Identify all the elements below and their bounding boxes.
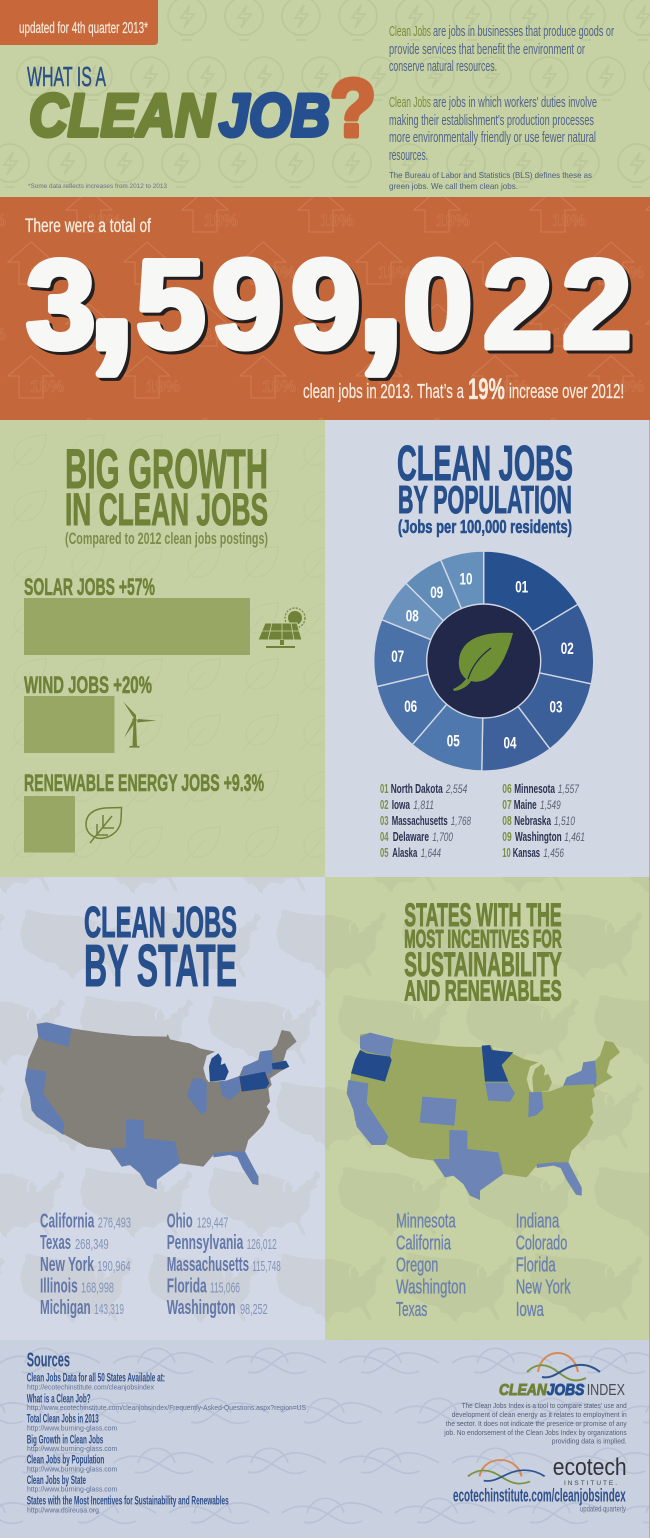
list: states column one: Michigan — [40, 1297, 91, 1319]
list: incentive states column two: New York — [516, 1276, 571, 1298]
source list: Clean Jobs by Population — [27, 1454, 104, 1466]
panel: total clean jobs hero — [0, 194, 650, 420]
icon: leaf — [86, 808, 122, 843]
bar: solar: SOLAR JOBS +57% — [24, 574, 155, 601]
increase statement: 19% — [468, 373, 505, 406]
list: states column two: 98,252 — [240, 1301, 268, 1318]
definition: first paragraph: conserve natural resources. — [389, 58, 497, 75]
disclaimer text: development of clean energy as it relates to employment in — [452, 1410, 627, 1419]
map: incentive states — [347, 1033, 620, 1200]
title: clean job?: JOB — [219, 82, 330, 149]
heading: IN CLEAN JOBS — [65, 484, 268, 535]
big number: 2 — [562, 236, 632, 374]
panel: what is a clean job header — [0, 0, 650, 198]
source list: Total Clean Jobs in 2013 — [27, 1414, 99, 1426]
icon: wind turbine — [123, 702, 157, 748]
legend: top ten states column two: 09 — [502, 829, 512, 844]
legend: top ten states column one: Alaska — [392, 845, 418, 860]
bar: renewable energy — [24, 770, 264, 852]
note: BLS definition — [389, 170, 592, 191]
source list: Clean Jobs Data for all 50 States Available at: — [27, 1373, 165, 1385]
source list: http://www.burning-glass.com — [27, 1466, 117, 1473]
source list: What is a Clean Job? — [27, 1394, 91, 1406]
disclaimer text: job. No endorsement of the Clean Jobs Index by organizations — [443, 1428, 627, 1437]
disclaimer text: the sector. It does not indicate the presence or promise of any — [446, 1419, 627, 1428]
legend: top ten states column two: 06 — [502, 781, 512, 796]
list: incentive states column one: Washington — [396, 1276, 466, 1298]
bar: renewable energy: RENEWABLE ENERGY JOBS +9.3% — [24, 770, 264, 797]
definition: first paragraph: Clean Jobs — [389, 23, 431, 40]
logo: clean jobs index: JOBS — [547, 1382, 585, 1399]
legend: top ten states column two: 1,557 — [558, 782, 580, 796]
heading: sources: Sources — [27, 1350, 70, 1372]
disclaimer text: providing data is implied. — [552, 1436, 627, 1446]
source list — [27, 1373, 306, 1514]
note: BLS definition: green jobs. We call them clean jobs. — [389, 181, 518, 191]
bar: wind: WIND JOBS +20% — [24, 672, 152, 699]
heading — [84, 899, 237, 999]
legend: top ten states column one: 1,644 — [421, 846, 441, 860]
note: BLS definition: The Bureau of Labor and Statistics (BLS) defines these as — [389, 170, 592, 180]
logo: clean jobs index: INDEX — [587, 1382, 625, 1399]
legend: top ten states column one: 1,768 — [451, 814, 471, 828]
legend: top ten states column one: 04 — [380, 829, 389, 844]
list: incentive states column two: Colorado — [516, 1232, 567, 1254]
list: states column one: 190,964 — [97, 1258, 131, 1275]
legend: top ten states column one: North Dakota — [391, 781, 443, 796]
heading: CLEAN JOBS — [84, 899, 237, 947]
list: states column one: 276,493 — [98, 1215, 131, 1232]
segment numbers: 10 — [460, 570, 472, 588]
list: incentive states column two: Iowa — [516, 1299, 545, 1321]
list: states column one — [40, 1211, 131, 1319]
legend: top ten states column two: Washington — [515, 829, 562, 844]
definition: second paragraph: resources. — [389, 147, 428, 164]
panel: footer sources and logos — [0, 1340, 650, 1538]
panel: clean jobs by state — [0, 877, 325, 1340]
legend: top ten states column two: 10 — [502, 845, 511, 860]
list: states column two: 115,748 — [252, 1258, 281, 1275]
list: states column one: 268,349 — [75, 1236, 109, 1253]
segment numbers: 06 — [404, 697, 417, 716]
definition: first paragraph — [389, 23, 614, 75]
legend: top ten states column one: Iowa — [392, 797, 410, 812]
segment numbers: 03 — [550, 698, 562, 716]
legend: top ten states column two: 1,549 — [540, 798, 561, 812]
increase statement — [303, 373, 624, 406]
list: states column two — [167, 1211, 281, 1319]
panel: big growth in clean jobs — [0, 420, 325, 877]
big number: , — [357, 194, 404, 384]
legend: top ten states column one: 01 — [380, 781, 388, 796]
segment numbers: 04 — [504, 734, 517, 752]
subheading: (Jobs per 100,000 residents) — [398, 517, 572, 537]
logo: clean jobs index: CLEAN — [499, 1382, 547, 1399]
logo: ecotech institute: INSTITUTE. — [564, 1480, 617, 1487]
legend: top ten states column two — [502, 781, 585, 860]
list: incentive states column two: Indiana — [516, 1211, 560, 1233]
source list: http://www.dsireusa.org — [27, 1507, 99, 1514]
source list: http://www.burning-glass.com — [27, 1446, 117, 1453]
heading: BY STATE — [84, 932, 237, 999]
list: states column one: 143,319 — [94, 1301, 124, 1318]
panel: states with most incentives — [325, 877, 650, 1340]
legend: top ten states column one — [380, 781, 471, 860]
list: incentive states column one: Texas — [396, 1299, 427, 1321]
tag: updated for 4th quarter — [0, 0, 158, 45]
increase statement: clean jobs in 2013. That’s a — [303, 381, 465, 403]
list: states column two: Florida — [167, 1276, 207, 1298]
legend: top ten states column one: 1,811 — [413, 798, 434, 812]
map: top states by clean jobs — [25, 1022, 297, 1189]
list: states column two: Ohio — [167, 1211, 193, 1233]
note: updated quarterly: updated quarterly — [580, 1505, 626, 1514]
legend: top ten states column one: 03 — [380, 813, 388, 828]
big number: 3 — [26, 236, 96, 374]
segment numbers: 08 — [406, 606, 419, 626]
source list: http://www.burning-glass.com — [27, 1426, 117, 1433]
legend: top ten states column one: 1,700 — [432, 830, 453, 844]
legend: top ten states column two: Kansas — [513, 845, 540, 860]
legend: top ten states column one: Delaware — [393, 829, 429, 844]
list: states column one: California — [40, 1211, 95, 1233]
big number: 0 — [403, 236, 473, 374]
segment numbers — [391, 570, 574, 752]
footnote: *Some data reflects increases from 2012 to 2013 — [28, 183, 167, 190]
heading: what is a: WHAT IS A — [27, 61, 106, 92]
list: incentive states column one — [396, 1211, 466, 1321]
big number: 2 — [483, 236, 553, 374]
list: states column one: 168,998 — [81, 1280, 114, 1297]
list: incentive states column two — [516, 1211, 571, 1321]
legend: top ten states column one: Massachusetts — [392, 813, 448, 828]
tag: updated for 4th quarter: updated for 4th quarter 2013* — [19, 20, 148, 37]
list: incentive states column two: Florida — [516, 1255, 556, 1277]
big number: , — [88, 194, 135, 384]
list: states column one: Illinois — [40, 1276, 78, 1298]
legend: top ten states column two: 08 — [502, 813, 512, 828]
logo: clean jobs index — [499, 1353, 625, 1399]
bar: wind — [24, 672, 152, 753]
title: clean job?: ? — [330, 63, 376, 154]
legend: top ten states column two: 1,456 — [543, 846, 564, 860]
big number: 5 — [136, 236, 206, 374]
definition: second paragraph: Clean Jobs — [389, 94, 431, 111]
panel: clean jobs by population — [325, 420, 650, 877]
big number: 9 — [291, 236, 361, 374]
list: states column two: Washington — [167, 1297, 236, 1319]
intro text: There were a total of — [25, 216, 152, 237]
legend: top ten states column one: 05 — [380, 845, 388, 860]
source list: http://ecotechinstitute.com/cleanjobsindex — [27, 1385, 154, 1392]
segment numbers: 01 — [515, 578, 528, 596]
source list: http://www.burning-glass.com — [27, 1487, 117, 1494]
source list: Clean Jobs by State — [27, 1475, 86, 1487]
list: incentive states column one: Minnesota — [396, 1211, 456, 1233]
big number: 9 — [212, 236, 282, 374]
legend: top ten states column one: 2,554 — [445, 782, 468, 796]
legend: top ten states column two: Maine — [514, 797, 537, 812]
legend: top ten states column one: 02 — [380, 797, 388, 812]
heading — [404, 897, 562, 1008]
legend: top ten states column two: 07 — [502, 797, 512, 812]
logo: ecotech institute: ecotech — [553, 1454, 627, 1481]
list: incentive states column one: Oregon — [396, 1255, 438, 1277]
legend: top ten states column two: 1,461 — [564, 830, 585, 844]
bar: solar — [24, 574, 250, 655]
source list: http://www.ecotechinstitute.com/cleanjobsindex/Frequently-Asked-Questions.aspx?region=US — [27, 1405, 306, 1412]
title: clean job?: CLEAN — [29, 82, 215, 149]
list: states column two: 129,447 — [197, 1215, 228, 1232]
title: clean job? — [29, 63, 376, 154]
heading: BIG GROWTH — [65, 437, 268, 500]
disclaimer text: The Clean Jobs Index is a tool to compare states' use and — [462, 1401, 627, 1410]
segment numbers: 02 — [561, 639, 574, 658]
segment numbers: 07 — [391, 647, 404, 666]
list: incentive states column one: California — [396, 1232, 452, 1254]
chart: radial ranking — [374, 551, 594, 771]
source list: States with the Most Incentives for Sustainability and Renewables — [27, 1495, 229, 1507]
disclaimer text — [443, 1401, 627, 1446]
list: states column one: Texas — [40, 1232, 71, 1254]
icon: solar panel — [258, 608, 305, 648]
list: states column two: 126,012 — [247, 1236, 277, 1253]
legend: top ten states column two: 1,510 — [554, 814, 575, 828]
logo: ecotech institute — [468, 1454, 627, 1487]
heading — [65, 437, 268, 535]
list: states column one: New York — [40, 1254, 95, 1276]
segment numbers: 09 — [430, 583, 443, 602]
segment numbers: 05 — [447, 732, 460, 750]
list: states column two: 115,066 — [210, 1280, 240, 1297]
icon: green leaf — [453, 633, 513, 691]
definition: second paragraph — [389, 94, 597, 164]
source list: Big Growth in Clean Jobs — [27, 1434, 103, 1446]
subheading: (Compared to 2012 clean jobs postings) — [65, 529, 268, 548]
list: states column two: Massachusetts — [167, 1254, 249, 1276]
legend: top ten states column two: Minnesota — [514, 781, 555, 796]
legend: top ten states column two: Nebraska — [514, 813, 551, 828]
heading — [397, 437, 573, 522]
list: states column two: Pennsylvania — [167, 1232, 244, 1254]
